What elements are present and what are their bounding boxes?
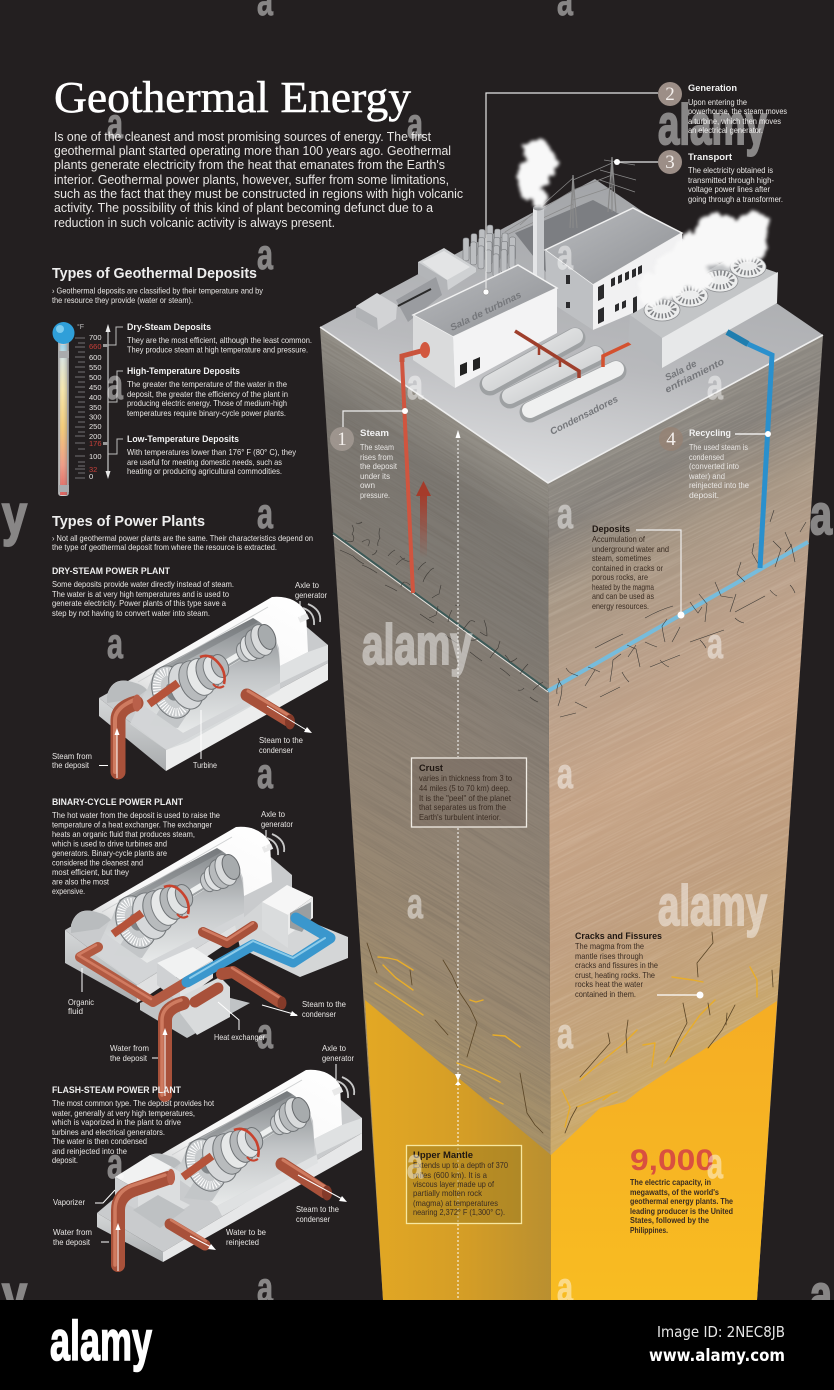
callout: crust: varies in thickness from 3 to — [419, 774, 512, 783]
intro paragraph: reduction in such volcanic activity is always present. — [54, 215, 335, 230]
ground labels — [548, 356, 726, 438]
plant description: water, generally at very high temperatures, — [51, 1109, 195, 1118]
callout: 9,000 megawatts: leading producer is the United — [630, 1207, 733, 1216]
watermark overlay: y — [2, 1263, 27, 1327]
upper mantle right face — [551, 1001, 777, 1300]
watermark overlay: a — [257, 750, 274, 798]
callout: water from the deposit: the deposit — [53, 1238, 91, 1247]
callout 1: steam: The steam — [360, 443, 394, 452]
plant description: deposit. — [52, 1156, 78, 1165]
watermark overlay: a — [407, 1140, 424, 1188]
crust right face — [548, 335, 823, 1300]
turbine hall building: Sala de turbinas — [448, 290, 523, 334]
callout: cracks and fissures: contained in them. — [575, 990, 636, 999]
intro paragraph: such as the fact that they must be constructed in regions with high volcanic — [54, 186, 463, 201]
callout 4: recycling: (converted into — [689, 462, 739, 471]
callout: upper mantle: Upper Mantle — [413, 1150, 473, 1161]
thermometer: 660 — [89, 342, 102, 351]
callout: deposits — [592, 524, 684, 618]
callout: axle to generator: Axle to — [261, 810, 285, 819]
thermometer: 176 — [89, 439, 102, 448]
callout: turbine: Turbine — [193, 761, 217, 770]
watermark overlay: alamy — [658, 93, 767, 157]
plant description — [52, 580, 234, 618]
plant description: turbines and electrical generators. — [52, 1128, 165, 1137]
watermark overlay: a — [557, 1010, 574, 1058]
callout: upper mantle: nearing 2,372° F (1,300° C). — [413, 1208, 505, 1217]
callout: steam to the condenser — [296, 1205, 339, 1224]
watermark overlay: a — [257, 231, 274, 279]
turbine illustration — [99, 597, 328, 778]
alamy logo: alamy — [50, 1309, 152, 1372]
dry-steam deposits text: They are the most efficient, although the least common. — [127, 336, 312, 345]
thermometer: 0 — [89, 472, 93, 481]
dry-steam deposits text — [127, 322, 312, 354]
thermometer: 500 — [89, 373, 102, 382]
callout: deposits: energy resources. — [592, 602, 649, 611]
watermark overlay: a — [107, 100, 124, 148]
callout 3: transport: The electricity obtained is — [688, 166, 773, 175]
geothermal plant on the surface — [356, 139, 778, 438]
callout: cracks and fissures: crust, heating rocks. The — [575, 971, 655, 980]
watermark overlay: a — [557, 490, 574, 538]
plant description: which is vaporized in the plant to drive — [51, 1118, 181, 1127]
watermark overlay: a — [707, 361, 724, 409]
callout 1: steam: 1 — [337, 429, 347, 450]
callout: water to be reinjected: reinjected — [226, 1238, 259, 1247]
steam clouds — [518, 139, 769, 306]
callout: vaporizer — [53, 1190, 115, 1207]
thermometer: 300 — [89, 412, 102, 422]
low-temperature deposits text: Low-Temperature Deposits — [127, 434, 239, 445]
callout: steam to the condenser: condenser — [296, 1215, 330, 1224]
panel: flash-steam power plant — [51, 1044, 362, 1271]
condenser cylinders — [490, 336, 616, 412]
callout: 9,000 megawatts: 9,000 — [630, 1144, 714, 1177]
generator housing — [356, 277, 442, 330]
panel: types of geothermal deposits — [52, 265, 312, 496]
callout: cracks and fissures: Cracks and Fissures — [575, 931, 662, 942]
steam pipe — [402, 342, 430, 593]
watermark overlay: a — [257, 490, 274, 538]
plant heading: BINARY-CYCLE POWER PLANT — [52, 797, 183, 807]
thermometer: 350 — [89, 403, 102, 412]
watermark overlay: a — [407, 100, 424, 148]
callout 1: steam: Steam — [360, 428, 389, 439]
high-temperature deposits text — [127, 366, 288, 418]
watermark overlay: a — [557, 231, 574, 279]
callout: crust: Earth's turbulent interior. — [419, 813, 501, 822]
watermark overlay: a — [107, 620, 124, 668]
thermometer: 32 — [89, 465, 97, 474]
callout: water to be reinjected: Water to be — [226, 1228, 266, 1237]
high-temperature deposits text: deposit, the greater the efficiency of the plant in — [127, 390, 288, 399]
callout: deposits: Accumulation of — [592, 535, 646, 544]
callout: heat exchanger — [214, 1002, 265, 1042]
callout: deposits: porous rocks, are — [592, 573, 648, 582]
ground labels: Condensadores — [548, 394, 620, 438]
callout: axle to generator: generator — [261, 820, 293, 829]
thermometer — [52, 322, 102, 496]
flow arrows — [116, 1175, 347, 1271]
callout 4: recycling: 4 — [666, 429, 676, 450]
flow arrows — [114, 706, 312, 778]
ground labels: Sala de — [663, 358, 699, 384]
watermark overlay: a — [107, 361, 124, 409]
deposit layer right — [548, 510, 808, 717]
condenser red pipes — [515, 331, 637, 378]
callout: cracks and fissures — [575, 931, 704, 999]
callout: axle to generator — [261, 810, 293, 848]
plant description: and reinjected into the — [52, 1147, 127, 1156]
callout: steam to the condenser: Steam to the — [296, 1205, 339, 1214]
callout: water from the deposit: the deposit — [110, 1054, 148, 1063]
callout 3: transport: voltage power lines after — [688, 185, 770, 194]
callout: steam to the condenser: condenser — [259, 746, 293, 755]
callout: 9,000 megawatts: Philippines. — [630, 1226, 668, 1235]
plant description: considered the cleanest and — [52, 858, 143, 868]
callout 1: steam: the deposit — [360, 462, 398, 471]
plant heading: DRY-STEAM POWER PLANT — [52, 566, 170, 576]
surface plate — [320, 179, 823, 483]
footer band — [0, 1300, 834, 1390]
panel: dry-steam power plant — [52, 566, 328, 778]
plant heading: FLASH-STEAM POWER PLANT — [52, 1085, 181, 1095]
low-temperature deposits text: With temperatures lower than 176° F (80° C), they — [127, 448, 297, 457]
callout: upper mantle: (magma) at temperatures — [413, 1199, 498, 1208]
intro paragraph: geothermal plant started operating more than 100 years ago. Geothermal — [54, 143, 451, 158]
callout 2: generation: Upon entering the — [688, 98, 747, 107]
callout: cracks and fissures: mantle rises through — [575, 952, 643, 961]
watermark overlay: alamy — [658, 874, 767, 938]
plant description: are also the most — [52, 878, 110, 886]
surface plate edges — [320, 327, 823, 483]
callout: 9,000 megawatts: The electric capacity, in — [630, 1178, 711, 1187]
callout: steam to the condenser: condenser — [302, 1010, 336, 1019]
watermark overlay: a — [257, 1264, 274, 1312]
heading: Types of Power Plants — [52, 513, 205, 530]
pipes — [115, 1160, 332, 1265]
callout: deposits: and can be used as — [592, 592, 654, 601]
cooling tower block — [628, 256, 778, 368]
ground labels: enfriamiento — [663, 356, 726, 396]
plant description: most efficient, but they — [52, 868, 130, 877]
plant description: heats an organic fluid that produces steam, — [52, 830, 195, 839]
callout 4: recycling: condensed — [689, 453, 724, 462]
callout 3: transport — [614, 150, 783, 204]
plant description — [51, 811, 220, 896]
plant description: The most common type. The deposit provides hot — [52, 1099, 215, 1108]
section intro — [52, 534, 313, 552]
watermark overlay: a — [257, 1010, 274, 1058]
pipes — [78, 918, 330, 1095]
callout: steam to the condenser — [302, 1000, 346, 1019]
callout: upper mantle: viscous layer made up of — [413, 1180, 495, 1189]
chimney — [533, 206, 544, 280]
callout 3: transport: transmitted through high- — [688, 176, 774, 185]
plant description: generate electricity. Power plants of this type save a — [52, 599, 226, 608]
lower platform and central box — [140, 985, 250, 1038]
callout: upper mantle: miles (600 km). It is a — [413, 1171, 487, 1180]
section intro: the resource they provide (water or steam). — [52, 296, 193, 305]
callout: axle to generator: generator — [295, 591, 327, 600]
watermark overlay: alamy — [362, 613, 472, 677]
callout 1: steam: under its — [360, 472, 390, 481]
callout 4: recycling: water) and — [688, 472, 725, 481]
magma cracks — [367, 932, 773, 1133]
plant description: which is used to drive turbines and — [51, 840, 167, 848]
recycled water pipe — [727, 332, 772, 568]
callout: vaporizer: Vaporizer — [53, 1198, 85, 1207]
low-temperature deposits text — [127, 434, 297, 476]
crust left face — [320, 327, 551, 1300]
callout: cracks and fissures: The magma from the — [575, 942, 644, 951]
callout 3: transport: going through a transformer. — [688, 195, 783, 204]
callout: deposits: underground water and — [592, 545, 669, 554]
callout: steam to the condenser: Steam to the — [259, 736, 303, 745]
callout 2: generation: 2 — [665, 84, 675, 105]
callout: 9,000 megawatts: megawatts, of the world's — [630, 1188, 719, 1197]
callout: deposits: contained in cracks or — [592, 564, 663, 573]
high-temperature deposits text: High-Temperature Deposits — [127, 366, 240, 377]
callout 1: steam — [330, 408, 408, 500]
callout: deposits: steam, sometimes — [592, 554, 651, 563]
callout: water to be reinjected — [226, 1228, 266, 1247]
callout: upper mantle — [406, 1146, 522, 1224]
callout: steam from the deposit: the deposit — [52, 761, 90, 770]
deposit layer left — [333, 522, 548, 702]
callout: heat exchanger: Heat exchanger — [214, 1033, 265, 1042]
callout 2: generation: an electrical generator. — [688, 126, 763, 135]
plant description: generators. Binary-cycle plants are — [52, 849, 167, 858]
intro paragraph: interior. Geothermal power plants, however, suffer from some limitations, — [54, 172, 449, 187]
plant description: The water is at very high temperatures and is used to — [52, 590, 229, 599]
watermark overlay: a — [557, 1264, 574, 1312]
pipes — [115, 691, 295, 772]
transformer — [418, 248, 476, 292]
callout: crust — [412, 758, 526, 827]
high-temperature deposits text: producing electric energy. Those of medium-high — [127, 399, 287, 408]
callout 4: recycling: Recycling — [689, 428, 731, 439]
callout 1: steam: rises from — [360, 453, 393, 462]
section intro: › Geothermal deposits are classified by their temperature and by — [52, 286, 264, 296]
callout: crust: It is the "peel" of the planet — [419, 794, 512, 803]
upper mantle left face — [365, 1000, 551, 1300]
plant description: The hot water from the deposit is used to raise the — [52, 811, 220, 820]
callout: axle to generator: generator — [322, 1054, 354, 1063]
low-temperature deposits text: heating or producing agricultural commodities. — [127, 467, 282, 476]
watermark overlay: a — [107, 1140, 124, 1188]
callout: upper mantle: Extends up to a depth of 370 — [413, 1161, 508, 1170]
flow arrows — [162, 1005, 298, 1096]
thermometer: 200 — [89, 432, 102, 441]
callout: cracks and fissures: rocks heat the water — [575, 980, 643, 989]
callout 4: recycling: The used steam is — [689, 443, 748, 452]
callout: water from the deposit: Water from — [110, 1044, 149, 1053]
back block — [515, 200, 640, 290]
callout: steam from the deposit — [52, 752, 108, 770]
watermark overlay: a — [407, 880, 424, 928]
title: Geothermal Energy — [54, 73, 411, 122]
plant description — [51, 1099, 215, 1165]
dry-steam deposits text: Dry-Steam Deposits — [127, 322, 211, 333]
plant description: Some deposits provide water directly instead of steam. — [52, 580, 234, 589]
thermometer: 450 — [89, 383, 102, 392]
intro paragraph — [54, 129, 463, 230]
thermometer: 600 — [89, 353, 102, 362]
callout: organic fluid: fluid — [68, 1007, 83, 1016]
watermark overlay: a — [407, 361, 424, 409]
callout 2: generation: Generation — [688, 83, 737, 94]
callout: organic fluid — [68, 968, 94, 1016]
watermark overlay: y — [2, 483, 27, 547]
thermometer: 400 — [89, 393, 102, 402]
callout: axle to generator — [322, 1044, 354, 1082]
callout: 9,000 megawatts: geothermal energy plants. The — [630, 1197, 733, 1206]
depth arrow dotted line — [455, 430, 461, 1300]
thermometer: 100 — [89, 452, 102, 461]
intro paragraph: Is one of the cleanest and most promising sources of energy. The first — [54, 129, 431, 144]
callout: 9,000 megawatts — [630, 1144, 733, 1235]
rising steam arrow — [416, 481, 431, 558]
panel: types of power plants heading — [52, 513, 313, 552]
thermometer: 550 — [89, 363, 102, 372]
callout: upper mantle: partially molten rock — [413, 1189, 483, 1198]
vaporizer — [115, 1155, 172, 1190]
callout: crust: that separates us from the — [419, 803, 506, 812]
heading: Types of Geothermal Deposits — [52, 265, 257, 282]
callout 1: steam: own — [360, 481, 375, 490]
low-temperature deposits text: are useful for meeting domestic needs, such as — [127, 458, 282, 467]
cylinder bank — [463, 225, 516, 277]
callout 4: recycling: reinjected into the — [689, 481, 749, 490]
callout: axle to generator — [295, 581, 327, 618]
illustration — [65, 827, 348, 1096]
rock strata texture — [320, 327, 823, 1300]
callout 1: steam: pressure. — [360, 491, 390, 500]
callout: steam from the deposit: Steam from — [52, 752, 92, 761]
callout: crust: 44 miles (5 to 70 km) deep. — [419, 784, 510, 793]
watermark overlay: a — [707, 1140, 724, 1188]
callout 2: generation — [483, 82, 787, 295]
callout: cracks and fissures: cracks and fissures in the — [575, 961, 658, 970]
callout: deposits: heated by the magma — [592, 583, 654, 592]
callout: organic fluid: Organic — [68, 998, 94, 1007]
illustration — [97, 1070, 362, 1271]
callout: axle to generator: Axle to — [322, 1044, 346, 1053]
right platform and box — [235, 902, 348, 977]
range arrow with brackets — [103, 324, 123, 479]
callout: crust: Crust — [419, 763, 444, 774]
image id: Image ID: 2NEC8JB — [657, 1323, 785, 1341]
callout: 9,000 megawatts: States, followed by the — [630, 1216, 709, 1225]
website: www.alamy.com — [649, 1346, 785, 1366]
high-temperature deposits text: The greater the temperature of the water in the — [127, 380, 287, 389]
callout 2: generation: a turbine, which then moves — [688, 117, 781, 126]
power house building — [545, 208, 682, 330]
plant description: expensive. — [52, 887, 85, 896]
intro paragraph: activity. The possibility of this kind of plant becoming defunct due to a — [54, 200, 434, 215]
watermark overlay: a — [557, 750, 574, 798]
callout: steam to the condenser: Steam to the — [302, 1000, 346, 1009]
callout: turbine — [193, 710, 217, 770]
turbine hall building — [413, 265, 557, 388]
callout: water from the deposit — [110, 1044, 158, 1063]
earth cross-section block — [320, 179, 823, 1300]
section intro — [52, 286, 264, 305]
callout 3: transport: Transport — [688, 152, 733, 163]
callout: steam to the condenser — [259, 736, 303, 755]
callout: deposits: Deposits — [592, 524, 630, 535]
callout 2: generation: powerhouse, the steam moves — [688, 107, 787, 116]
thermometer: °F — [77, 323, 84, 331]
panel: binary-cycle power plant — [51, 797, 348, 1096]
plant description: The water is then condensed — [52, 1137, 147, 1146]
intro paragraph: plants generate electricity from the heat that emanates from the Earth's — [54, 157, 445, 172]
thermometer: 250 — [89, 422, 102, 431]
thermometer: 700 — [89, 333, 102, 342]
high-temperature deposits text: temperatures require binary-cycle power plants. — [127, 409, 286, 418]
callout 4: recycling: deposit. — [689, 491, 719, 500]
plant description: temperature of a heat exchanger. The exchanger — [52, 820, 212, 830]
plant description: step by not having to convert water into steam. — [52, 609, 210, 618]
callout 4: recycling — [659, 427, 771, 500]
callout: water from the deposit — [53, 1228, 109, 1247]
section intro: the type of geothermal deposit from where the resource is extracted. — [52, 543, 277, 552]
callout: axle to generator: Axle to — [295, 581, 319, 590]
dry-steam deposits text: They produce steam at high temperature and pressure. — [127, 346, 308, 354]
callout: water from the deposit: Water from — [53, 1228, 92, 1237]
section intro: › Not all geothermal power plants are the same. Their characteristics depend on — [52, 534, 313, 543]
watermark overlay: a — [707, 620, 724, 668]
callout 3: transport: 3 — [665, 152, 675, 173]
power lines and pylons — [500, 157, 636, 238]
